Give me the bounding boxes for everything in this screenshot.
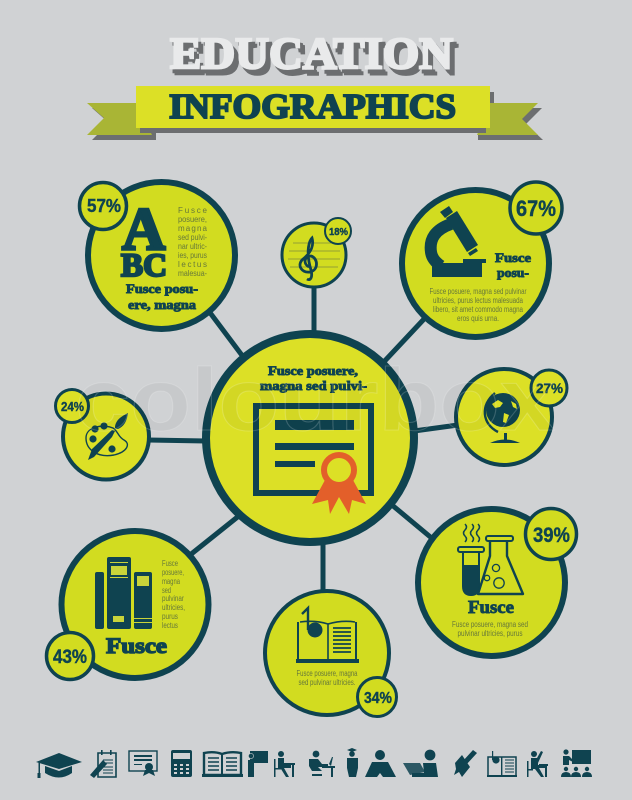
badge: 18%: 18% bbox=[329, 226, 349, 238]
icon: teacher with class bbox=[561, 749, 592, 777]
microscope text: eros quis urna. bbox=[457, 314, 499, 323]
badge: 34%: 34% bbox=[364, 690, 392, 707]
ABC side text: Fusce bbox=[178, 206, 208, 215]
ABC side text: lectus bbox=[178, 260, 207, 269]
icon: graduate figure bbox=[347, 748, 358, 777]
icon: student at desk bbox=[274, 751, 295, 777]
ABC side text bbox=[178, 206, 208, 278]
central heading: Fusce posuere, bbox=[268, 363, 358, 378]
badge: 57% bbox=[80, 182, 126, 230]
badge: 43%: 43% bbox=[53, 647, 87, 668]
ABC heading: ere, magna bbox=[128, 297, 197, 312]
panel: palette 24% bbox=[56, 390, 149, 480]
ABC heading bbox=[126, 281, 198, 312]
icon: calculator bbox=[171, 750, 192, 777]
icon: student with computer bbox=[309, 751, 335, 777]
music book text: sed pulvinar ultricies. bbox=[298, 678, 356, 687]
books text: lectus bbox=[162, 621, 178, 630]
icon: student raising hand bbox=[527, 751, 548, 777]
icon: palette and brush bbox=[86, 413, 128, 460]
icon: graduation cap bbox=[36, 753, 82, 778]
badge: 57%: 57% bbox=[87, 196, 121, 216]
title: EDUCATION: EDUCATION bbox=[175, 35, 458, 84]
books text: pulvinar bbox=[162, 594, 184, 603]
banner text: INFOGRAPHICS bbox=[169, 87, 456, 126]
ABC side text: magna bbox=[178, 224, 208, 233]
icon: open book with note bbox=[296, 608, 359, 663]
icon: flasks bbox=[458, 524, 523, 595]
icon: treble clef bbox=[300, 238, 316, 280]
icon: certificate bbox=[256, 406, 371, 514]
books text: sed bbox=[162, 586, 171, 595]
central heading bbox=[260, 363, 367, 393]
books heading: Fusce bbox=[106, 633, 167, 658]
badge: 67%: 67% bbox=[516, 196, 556, 221]
panel: music book 34% bbox=[265, 591, 396, 716]
panel: chemistry 39% bbox=[418, 508, 576, 656]
icon: clipboard and pen bbox=[90, 750, 116, 778]
ABC side text: posuere, bbox=[178, 215, 207, 224]
microscope heading: Fusce bbox=[495, 250, 531, 265]
chemistry text: Fusce posuere, magna sed bbox=[452, 620, 528, 629]
panel: music 18% bbox=[282, 218, 351, 287]
badge: 39% bbox=[526, 508, 576, 560]
badge: 27%: 27% bbox=[536, 380, 564, 396]
microscope text: ultricies, purus lectus malesuada bbox=[433, 296, 523, 305]
panel: central certificate bbox=[206, 334, 414, 542]
books text: purus bbox=[162, 612, 178, 621]
icon: laptop person bbox=[403, 750, 438, 777]
title: EDUCATION: EDUCATION bbox=[170, 29, 453, 78]
microscope heading bbox=[495, 250, 531, 280]
panel: books 43% bbox=[46, 531, 208, 680]
icon: microscope bbox=[431, 206, 486, 277]
music book text bbox=[296, 669, 358, 687]
books text: ultricies, bbox=[162, 603, 185, 612]
banner: INFOGRAPHICS ribbon bbox=[87, 86, 543, 140]
microscope text: libero, sit amet commodo magna bbox=[433, 305, 523, 314]
chemistry heading: Fusce bbox=[468, 597, 514, 617]
ABC heading: Fusce posu- bbox=[126, 281, 198, 296]
ABC side text: ies, purus bbox=[178, 251, 207, 260]
icon: book with note bbox=[487, 751, 517, 777]
icon: globe bbox=[485, 393, 520, 443]
books text: Fusce bbox=[162, 559, 178, 568]
icon: ABC letters: A bbox=[122, 196, 165, 262]
ABC side text: sed pulvi- bbox=[178, 233, 207, 242]
watermark: colourbox bbox=[75, 350, 555, 449]
chemistry text bbox=[452, 620, 528, 638]
panel: ABC 57% bbox=[80, 182, 235, 329]
icon: open book bbox=[202, 752, 243, 777]
title: EDUCATION: EDUCATION bbox=[173, 33, 456, 82]
books text: magna bbox=[162, 577, 180, 586]
microscope text: Fusce posuere, magna sed pulvinar bbox=[430, 287, 527, 296]
ABC side text: nar ultric- bbox=[178, 242, 207, 251]
badge: 43% bbox=[46, 632, 94, 680]
icon: teacher at board bbox=[248, 751, 268, 777]
books text: posuere, bbox=[162, 568, 184, 577]
icon: bell bbox=[454, 750, 477, 777]
microscope heading: posu- bbox=[497, 265, 529, 280]
music book text: Fusce posuere, magna bbox=[296, 669, 358, 678]
central heading: magna sed pulvi- bbox=[260, 378, 367, 393]
books text bbox=[162, 559, 185, 630]
badge: 67% bbox=[510, 182, 562, 234]
icon: ABC letters: BC bbox=[121, 248, 167, 284]
panel: microscope 67% bbox=[402, 182, 562, 337]
icon: small certificate bbox=[129, 751, 157, 776]
icon: books bbox=[95, 557, 152, 629]
ABC side text: malesua- bbox=[178, 269, 207, 278]
badge: 24%: 24% bbox=[61, 399, 84, 414]
chemistry text: pulvinar ultricies, purus bbox=[458, 629, 522, 638]
panel: globe 27% bbox=[456, 369, 567, 465]
connector lines bbox=[148, 285, 458, 594]
microscope text bbox=[430, 287, 527, 323]
staff lines bbox=[288, 243, 340, 267]
icon: reader bbox=[365, 750, 396, 777]
icon row bbox=[36, 748, 592, 778]
badge: 39%: 39% bbox=[533, 524, 570, 547]
